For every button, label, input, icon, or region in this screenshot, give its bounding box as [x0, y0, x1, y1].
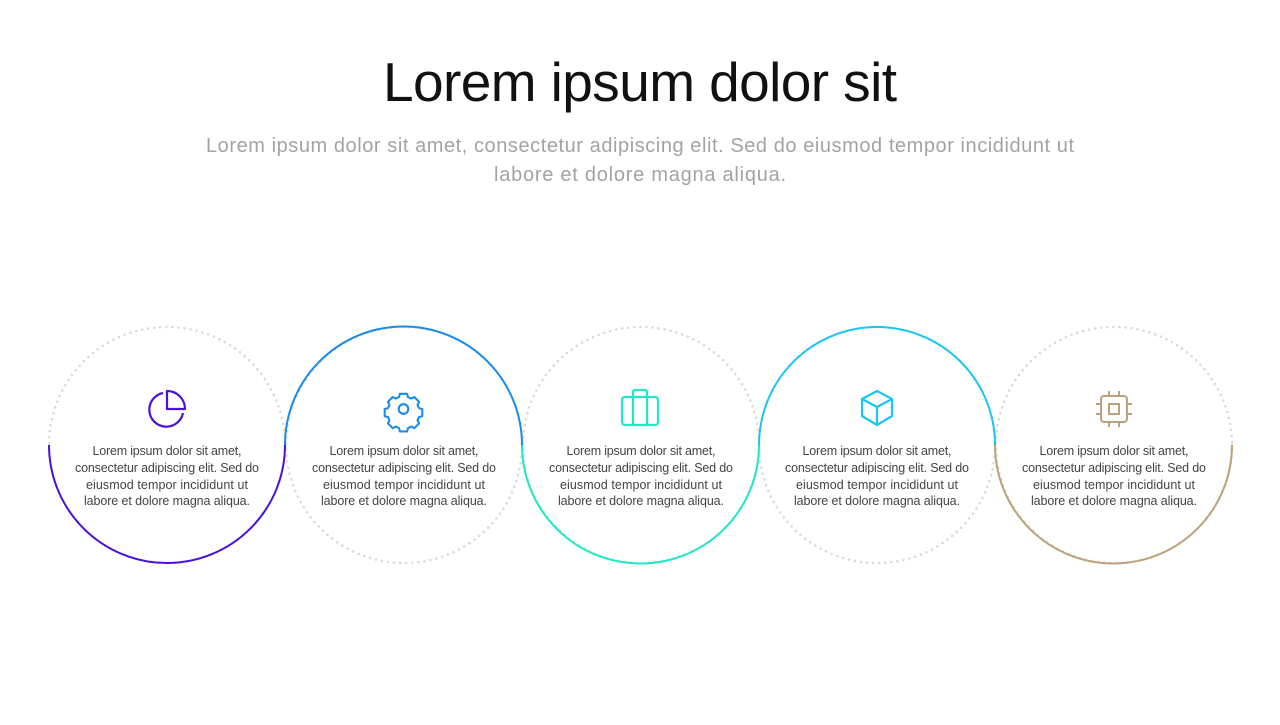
text 3: labore et dolore magna aliqua.	[558, 494, 724, 508]
text 4: Lorem ipsum dolor sit amet,	[802, 444, 952, 458]
text 1: eiusmod tempor incididunt ut	[86, 478, 249, 492]
text 1: labore et dolore magna aliqua.	[84, 494, 250, 508]
subtitle: labore et dolore magna aliqua.	[494, 164, 786, 186]
text 1: consectetur adipiscing elit. Sed do	[75, 461, 259, 475]
text 3: consectetur adipiscing elit. Sed do	[549, 461, 733, 475]
subtitle	[206, 135, 1074, 186]
text 4: labore et dolore magna aliqua.	[794, 494, 960, 508]
text 5: consectetur adipiscing elit. Sed do	[1022, 461, 1206, 475]
text 2: consectetur adipiscing elit. Sed do	[312, 461, 496, 475]
step 4	[759, 327, 995, 508]
text 2: Lorem ipsum dolor sit amet,	[330, 444, 478, 458]
text 2: labore et dolore magna aliqua.	[321, 494, 487, 508]
text 4: consectetur adipiscing elit. Sed do	[785, 461, 969, 475]
step 1	[49, 391, 285, 563]
icon: briefcase	[622, 390, 658, 425]
text 5: labore et dolore magna aliqua.	[1031, 494, 1197, 508]
text 5: eiusmod tempor incididunt ut	[1033, 478, 1196, 492]
subtitle: Lorem ipsum dolor sit amet, consectetur adipiscing elit. Sed do eiusmod tempor incididunt ut	[206, 135, 1074, 157]
text 3: Lorem ipsum dolor sit amet,	[566, 444, 716, 458]
text 2: eiusmod tempor incididunt ut	[323, 478, 486, 492]
title: Lorem ipsum dolor sit	[383, 51, 897, 113]
text 2	[312, 444, 496, 508]
step 5	[995, 391, 1232, 563]
icon: chip	[1096, 391, 1132, 427]
icon: pie chart	[149, 391, 185, 427]
icon: gear	[385, 394, 422, 431]
text 3: eiusmod tempor incididunt ut	[560, 478, 723, 492]
text 5	[1022, 444, 1206, 508]
text 5: Lorem ipsum dolor sit amet,	[1040, 444, 1188, 458]
text 3	[549, 444, 733, 508]
text 1: Lorem ipsum dolor sit amet,	[92, 444, 242, 458]
step 2	[285, 326, 522, 508]
text 1	[75, 444, 259, 508]
text 4	[785, 444, 969, 508]
icon: cube	[862, 391, 892, 425]
dotted circles	[49, 327, 1232, 563]
step 3	[522, 390, 759, 563]
text 4: eiusmod tempor incididunt ut	[796, 478, 959, 492]
